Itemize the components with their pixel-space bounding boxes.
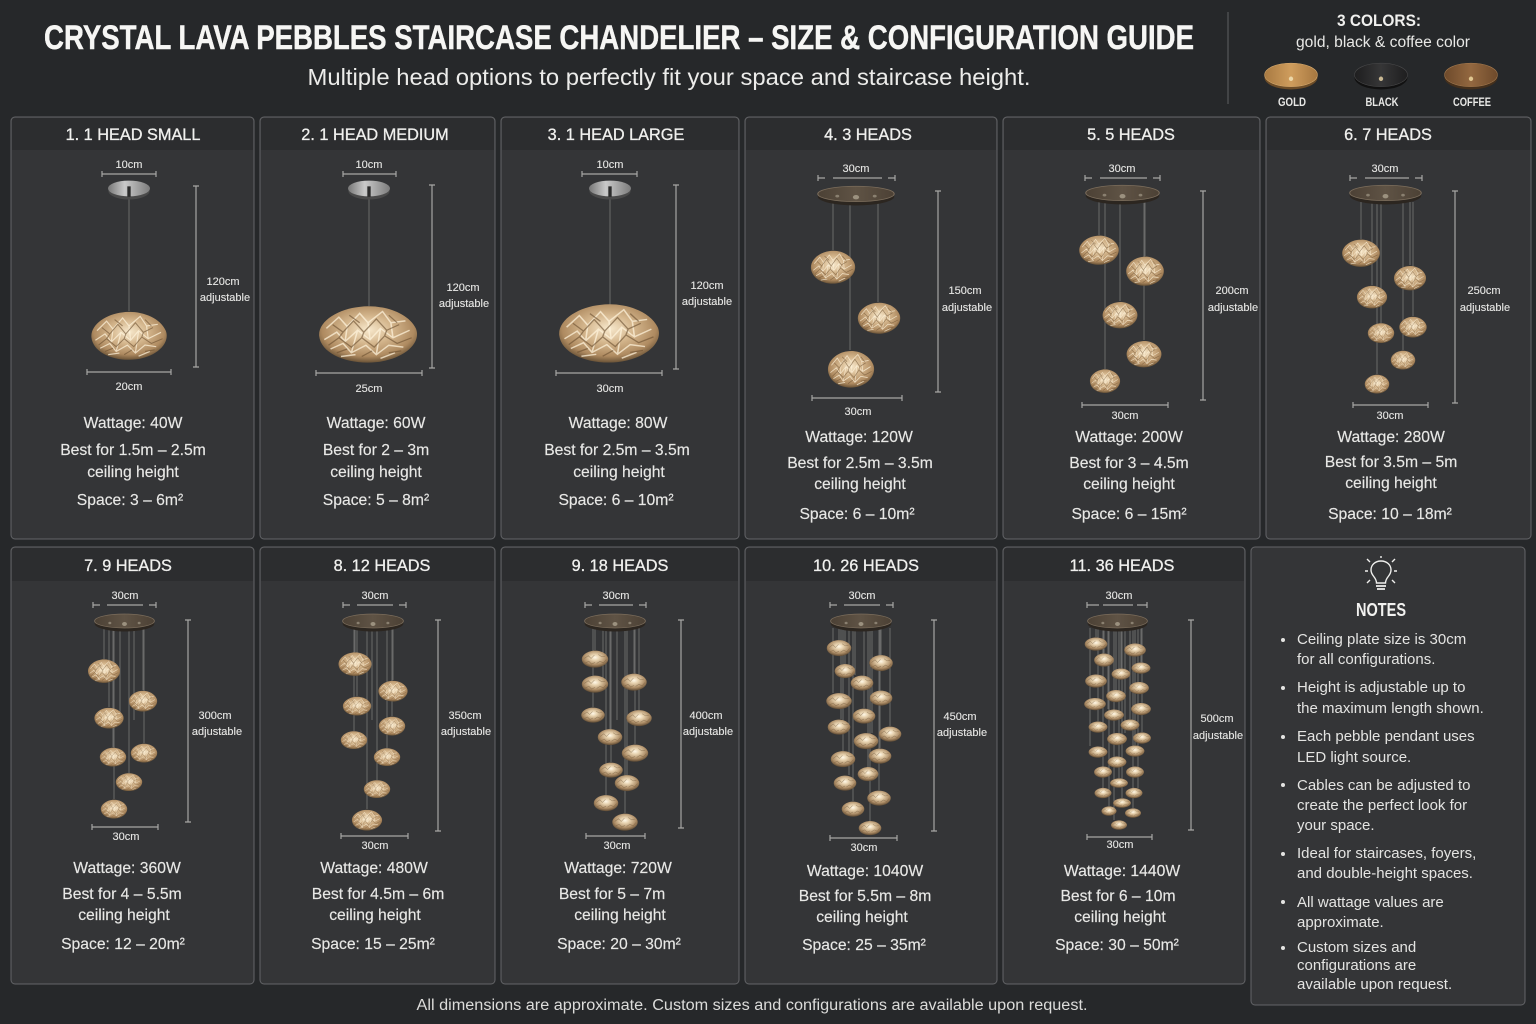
note: custom: available upon request. <box>1297 976 1452 993</box>
specifications: Wattage: 60W <box>327 415 426 432</box>
bottom width dimension: 30cm <box>604 840 630 852</box>
height dimension <box>185 620 242 822</box>
bottom width dimension <box>812 395 902 418</box>
ceiling plate <box>1088 614 1147 632</box>
note: ceiling plate <box>1281 631 1466 668</box>
height dimension: 400cm <box>689 710 723 722</box>
specifications: Space: 6 – 10m² <box>799 506 915 523</box>
cord <box>128 198 130 311</box>
specifications: Best for 5 – 7m <box>559 886 665 903</box>
cords <box>593 628 639 813</box>
cords <box>1090 628 1142 820</box>
height dimension <box>935 191 992 392</box>
pendant <box>559 304 659 363</box>
black label: BLACK <box>1366 97 1399 109</box>
plate width dimension <box>102 159 156 177</box>
specifications: Best for 2 – 3m <box>323 442 429 459</box>
panel: 5 heads <box>1003 117 1260 539</box>
specifications: Wattage: 360W <box>73 860 181 877</box>
bottom width dimension: 30cm <box>845 406 871 418</box>
plate width dimension: 30cm <box>843 163 869 175</box>
height dimension: adjustable <box>942 302 992 314</box>
gold label: GOLD <box>1278 97 1306 109</box>
gold plate <box>1265 63 1317 89</box>
note: height: the maximum length shown. <box>1297 700 1484 717</box>
plate width dimension <box>343 590 406 608</box>
cord <box>609 198 611 305</box>
colours heading: 3 COLORS: <box>1337 11 1421 30</box>
height dimension <box>673 185 732 369</box>
specifications: Best for 4.5m – 6m <box>312 886 444 903</box>
note: ideal uses: Ideal for staircases, foyers, <box>1297 845 1476 862</box>
height dimension: 450cm <box>943 711 977 723</box>
height dimension: adjustable <box>1193 730 1243 742</box>
specifications <box>557 860 681 953</box>
icon: light bulb <box>1365 556 1397 589</box>
height dimension: 200cm <box>1215 285 1249 297</box>
specifications: Wattage: 1440W <box>1064 863 1180 880</box>
height dimension <box>1200 191 1258 400</box>
specifications: ceiling height <box>87 464 179 481</box>
panel: 26 heads <box>745 547 997 984</box>
plate width dimension <box>93 590 156 608</box>
ceiling plate <box>1086 185 1159 204</box>
ceiling plate <box>348 181 390 199</box>
heading: 8. 12 HEADS <box>334 557 431 575</box>
heading: 9. 18 HEADS <box>572 557 669 575</box>
note: wattage <box>1281 894 1444 931</box>
ceiling plate <box>589 181 631 199</box>
height dimension: 350cm <box>448 710 482 722</box>
subtitle: Multiple head options to perfectly fit your space and staircase height. <box>308 64 1030 90</box>
bottom width dimension: 30cm <box>1112 410 1138 422</box>
height dimension: adjustable <box>192 726 242 738</box>
plate width dimension: 10cm <box>597 159 623 171</box>
specifications: Wattage: 1040W <box>807 863 923 880</box>
colours subheading: gold, black & coffee color <box>1296 34 1470 51</box>
height dimension: 120cm <box>446 282 480 294</box>
pendant width dimension: 20cm <box>116 381 142 393</box>
panel: notes <box>1251 547 1525 1005</box>
specifications: Wattage: 280W <box>1337 429 1445 446</box>
height dimension <box>429 185 489 368</box>
specifications: Best for 3 – 4.5m <box>1069 455 1189 472</box>
heading: 6. 7 HEADS <box>1344 126 1432 144</box>
specifications <box>799 863 931 954</box>
height dimension <box>678 620 733 828</box>
bottom width dimension <box>92 824 158 843</box>
plate width dimension: 30cm <box>1372 163 1398 175</box>
specifications: ceiling height <box>329 907 421 924</box>
bottom width dimension: 30cm <box>1377 410 1403 422</box>
specifications: Space: 5 – 8m² <box>323 492 429 509</box>
specifications: ceiling height <box>1083 476 1175 493</box>
specifications: Space: 3 – 6m² <box>77 492 183 509</box>
plate width dimension <box>1350 163 1422 181</box>
specifications: Best for 2.5m – 3.5m <box>544 442 690 459</box>
ceiling plate <box>1350 185 1421 204</box>
specifications: Best for 2.5m – 3.5m <box>787 455 933 472</box>
plate width dimension: 30cm <box>1109 163 1135 175</box>
specifications: Space: 10 – 18m² <box>1328 506 1452 523</box>
panel: 9 heads <box>11 547 254 984</box>
height dimension: adjustable <box>1460 302 1510 314</box>
specifications: Wattage: 720W <box>564 860 672 877</box>
pendants <box>339 652 408 830</box>
height dimension <box>193 186 250 367</box>
bottom width dimension: 30cm <box>113 831 139 843</box>
note: wattage: approximate. <box>1297 914 1384 931</box>
pendant width dimension: 30cm <box>597 383 623 395</box>
specifications: Wattage: 120W <box>805 429 913 446</box>
heading: 7. 9 HEADS <box>84 557 172 575</box>
note: custom: configurations are <box>1297 957 1416 974</box>
plate width dimension <box>343 159 396 177</box>
height dimension <box>1452 191 1510 403</box>
note: height: Height is adjustable up to <box>1297 679 1465 696</box>
coffee plate <box>1445 63 1497 89</box>
note: custom: Custom sizes and <box>1297 939 1416 956</box>
bottom width dimension: 30cm <box>851 842 877 854</box>
height dimension: adjustable <box>441 726 491 738</box>
specifications <box>61 860 185 953</box>
bottom width dimension <box>830 835 897 854</box>
height dimension: 120cm <box>206 276 240 288</box>
note: height <box>1281 679 1484 717</box>
black plate <box>1355 63 1407 89</box>
specifications: ceiling height <box>816 909 908 926</box>
pendants <box>88 659 157 819</box>
bottom width dimension <box>586 833 645 852</box>
plate width dimension <box>1087 590 1147 608</box>
panel: 7 heads <box>1266 117 1531 539</box>
specifications <box>323 415 429 509</box>
panel: 12 heads <box>260 547 495 984</box>
note: ideal uses: and double-height spaces. <box>1297 865 1473 882</box>
height dimension: adjustable <box>439 298 489 310</box>
bottom width dimension: 30cm <box>1107 839 1133 851</box>
heading: 3. 1 HEAD LARGE <box>548 126 684 144</box>
bottom width dimension <box>1087 834 1152 851</box>
specifications: Space: 15 – 25m² <box>311 936 435 953</box>
specifications: Space: 20 – 30m² <box>557 936 681 953</box>
note: custom <box>1281 939 1452 993</box>
specifications: Best for 3.5m – 5m <box>1325 454 1457 471</box>
colour options <box>1265 11 1497 109</box>
specifications <box>1069 429 1189 523</box>
specifications: Space: 6 – 15m² <box>1071 506 1187 523</box>
panel: 18 heads <box>501 547 739 984</box>
note: LED: LED light source. <box>1297 749 1411 766</box>
pendants <box>1084 638 1151 830</box>
pendant <box>319 306 417 363</box>
height dimension: adjustable <box>937 727 987 739</box>
title: CRYSTAL LAVA PEBBLES STAIRCASE CHANDELIER – SIZE & CONFIGURATION GUIDE <box>44 19 1194 57</box>
ceiling plate <box>585 614 645 632</box>
panel: 1 head medium <box>260 117 495 539</box>
notes heading: NOTES <box>1356 599 1406 620</box>
height dimension: adjustable <box>1208 302 1258 314</box>
plate width dimension: 10cm <box>116 159 142 171</box>
heading: 11. 36 HEADS <box>1070 557 1174 575</box>
plate width dimension <box>830 590 893 608</box>
note: ideal uses <box>1281 845 1476 882</box>
plate width dimension: 30cm <box>362 590 388 602</box>
specifications: Best for 1.5m – 2.5m <box>60 442 206 459</box>
plate width dimension <box>1085 163 1160 181</box>
specifications: Best for 6 – 10m <box>1060 888 1176 905</box>
heading: 10. 26 HEADS <box>813 557 919 575</box>
specifications: Best for 4 – 5.5m <box>62 886 182 903</box>
bottom width dimension: 30cm <box>362 840 388 852</box>
note: cables: your space. <box>1297 817 1375 834</box>
specifications: Wattage: 200W <box>1075 429 1183 446</box>
height dimension <box>435 620 491 831</box>
pendants <box>826 640 901 835</box>
ceiling plate <box>818 186 894 205</box>
cords <box>833 628 890 821</box>
height dimension: adjustable <box>200 292 250 304</box>
height dimension: 300cm <box>198 710 232 722</box>
specifications: Space: 30 – 50m² <box>1055 937 1179 954</box>
heading: 2. 1 HEAD MEDIUM <box>301 126 449 144</box>
pendant width dimension <box>556 370 662 395</box>
specifications: Space: 6 – 10m² <box>558 492 674 509</box>
note: ceiling plate: Ceiling plate size is 30cm <box>1297 631 1466 648</box>
pendants <box>1342 240 1427 394</box>
specifications: ceiling height <box>1345 475 1437 492</box>
bottom width dimension <box>341 833 408 852</box>
cords <box>1361 202 1413 374</box>
height dimension: 120cm <box>690 280 724 292</box>
bottom width dimension <box>1082 402 1168 422</box>
specifications: Wattage: 480W <box>320 860 428 877</box>
panel: 36 heads <box>1003 547 1245 984</box>
height dimension <box>1188 620 1243 830</box>
cords <box>1099 202 1145 369</box>
footer note: All dimensions are approximate. Custom sizes and configurations are available upon request. <box>416 997 1088 1014</box>
height dimension: 250cm <box>1467 285 1501 297</box>
specifications: ceiling height <box>78 907 170 924</box>
note: cables <box>1281 777 1470 834</box>
pendants <box>811 251 900 388</box>
specifications: Wattage: 40W <box>84 415 183 432</box>
height dimension: adjustable <box>682 296 732 308</box>
coffee label: COFFEE <box>1453 97 1491 109</box>
heading: 1. 1 HEAD SMALL <box>66 126 200 144</box>
cords <box>833 202 878 350</box>
ceiling plate <box>108 181 150 199</box>
plate width dimension: 30cm <box>849 590 875 602</box>
note: cables: create the perfect look for <box>1297 797 1467 814</box>
pendant width dimension: 25cm <box>356 383 382 395</box>
plate width dimension: 30cm <box>1106 590 1132 602</box>
ceiling plate <box>343 614 403 632</box>
specifications: Space: 25 – 35m² <box>802 937 926 954</box>
plate width dimension <box>818 163 895 181</box>
specifications <box>311 860 444 953</box>
panel: 1 head small <box>11 117 254 539</box>
specifications <box>60 415 206 509</box>
specifications: Wattage: 80W <box>569 415 668 432</box>
pendant width dimension <box>87 369 171 393</box>
specifications <box>544 415 690 509</box>
ceiling plate <box>831 614 891 632</box>
specifications: Best for 5.5m – 8m <box>799 888 931 905</box>
cords <box>354 628 393 809</box>
note: cables: Cables can be adjusted to <box>1297 777 1470 794</box>
pendant <box>91 312 167 360</box>
plate width dimension <box>582 159 637 177</box>
heading: 5. 5 HEADS <box>1087 126 1175 144</box>
specifications: ceiling height <box>814 476 906 493</box>
plate width dimension: 30cm <box>603 590 629 602</box>
height dimension: adjustable <box>683 726 733 738</box>
specifications: ceiling height <box>573 464 665 481</box>
bottom width dimension <box>1353 402 1428 422</box>
ceiling plate <box>95 614 154 632</box>
panel: 3 heads <box>745 117 997 539</box>
note: LED: Each pebble pendant uses <box>1297 728 1475 745</box>
heading: 4. 3 HEADS <box>824 126 912 144</box>
specifications: Space: 12 – 20m² <box>61 936 185 953</box>
cords <box>104 628 144 799</box>
height dimension: 150cm <box>948 285 982 297</box>
height dimension <box>931 620 987 831</box>
plate width dimension <box>585 590 646 608</box>
specifications <box>787 429 933 523</box>
plate width dimension: 30cm <box>112 590 138 602</box>
specifications <box>1325 429 1457 523</box>
pendant width dimension <box>316 370 422 395</box>
specifications <box>1055 863 1180 954</box>
note: LED <box>1281 728 1475 766</box>
note: ceiling plate: for all configurations. <box>1297 651 1435 668</box>
specifications: ceiling height <box>574 907 666 924</box>
specifications: ceiling height <box>1074 909 1166 926</box>
height dimension: 500cm <box>1200 713 1234 725</box>
specifications: ceiling height <box>330 464 422 481</box>
note: wattage: All wattage values are <box>1297 894 1444 911</box>
panel: 1 head large <box>501 117 739 539</box>
cord <box>368 198 370 306</box>
pendants <box>581 651 652 831</box>
plate width dimension: 10cm <box>356 159 382 171</box>
pendants <box>1079 236 1164 393</box>
